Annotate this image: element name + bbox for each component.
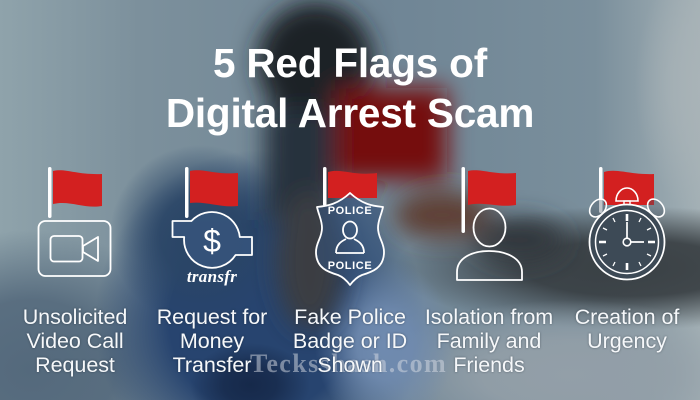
label: urgency: Creation of <box>575 305 679 329</box>
label: fake police badge: Badge or ID <box>293 329 407 353</box>
icon: police badge flag: POLICE <box>328 260 372 272</box>
label: money transfer: Money <box>180 329 244 353</box>
icon: isolation flag <box>457 167 522 280</box>
title <box>166 40 534 136</box>
icon: police badge flag: POLICE <box>328 205 372 217</box>
title: 5 Red Flags of <box>213 40 487 86</box>
label: isolation: Family and <box>437 329 541 353</box>
script caption: transfr <box>187 267 237 286</box>
label: unsolicited video call: Unsolicited <box>23 305 127 329</box>
label: urgency <box>575 305 680 354</box>
dollar sign: $ <box>203 223 221 259</box>
label: money transfer: Transfer <box>173 353 251 377</box>
label: fake police badge <box>293 305 408 377</box>
officer silhouette <box>336 222 364 253</box>
label: money transfer: Request for <box>157 305 267 329</box>
label: money transfer <box>157 305 267 377</box>
icon: urgency clock flag <box>586 167 668 280</box>
watermark: Tecksshash.com <box>250 349 447 378</box>
label: isolation: Friends <box>453 353 525 377</box>
label: fake police badge: Fake Police <box>294 305 406 329</box>
label: unsolicited video call: Video Call <box>26 329 124 353</box>
icon: video call flag <box>38 167 110 276</box>
label: urgency: Urgency <box>587 329 667 353</box>
label: unsolicited video call: Request <box>35 353 115 377</box>
title: Digital Arrest Scam <box>166 90 534 136</box>
label: fake police badge: Shown <box>317 353 383 377</box>
icon: money transfer flag <box>172 167 252 286</box>
label: unsolicited video call <box>23 305 127 377</box>
icon: police badge flag <box>316 167 384 285</box>
label: isolation <box>425 305 553 377</box>
label: isolation: Isolation from <box>425 305 553 329</box>
